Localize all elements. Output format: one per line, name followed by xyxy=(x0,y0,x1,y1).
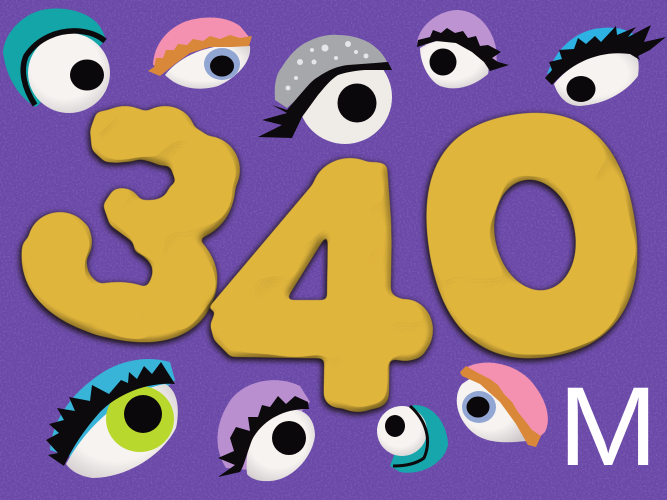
black lash line xyxy=(393,406,428,466)
teal felt lid xyxy=(390,405,448,473)
clay lumps thickening the 3 xyxy=(28,106,240,338)
white eyeball xyxy=(247,410,315,481)
silver glitter lid xyxy=(275,35,387,108)
eye: silver glitter lid xyxy=(258,35,392,144)
eye: small teal bottom xyxy=(377,405,448,473)
eye: pink lid top xyxy=(148,17,252,89)
black spiky lash xyxy=(545,25,666,85)
blue iris xyxy=(462,391,496,423)
black lash line xyxy=(23,31,105,105)
pupil xyxy=(210,56,234,76)
clay lumps thickening the 4 xyxy=(281,154,438,420)
digit 3: 3 xyxy=(0,46,266,404)
digit 3 xyxy=(15,102,244,350)
eye: lilac lid bottom xyxy=(217,380,315,481)
pupil xyxy=(70,60,104,90)
orange scalloped trim xyxy=(148,35,252,76)
number 340 in yellow clay xyxy=(15,102,642,420)
eye: teal top left xyxy=(3,8,110,113)
pupil xyxy=(338,84,376,122)
black zigzag lash xyxy=(218,396,309,477)
eye: blue lid with green iris xyxy=(46,359,178,478)
white eyeball xyxy=(554,52,639,106)
pupil xyxy=(466,396,490,418)
blue felt lid xyxy=(50,359,175,460)
glitter sparkles xyxy=(286,41,368,90)
blue iris xyxy=(204,48,240,80)
black zigzag lash xyxy=(417,28,509,71)
digit 0: 0 xyxy=(402,47,662,424)
white eyeball xyxy=(298,50,392,144)
white eyeball xyxy=(28,33,110,113)
green iris xyxy=(106,386,174,452)
eye: blue lid top right xyxy=(545,25,666,106)
black lash band with lashes xyxy=(258,62,392,138)
eye: lilac lid top xyxy=(417,10,509,88)
eye: pink lid lower right xyxy=(457,363,548,447)
white eyeball xyxy=(420,40,488,88)
teal felt lid xyxy=(3,8,106,107)
clay lump around the 0 counter xyxy=(485,156,576,312)
pink felt lid xyxy=(153,17,250,66)
lilac felt lid xyxy=(417,10,497,64)
digit 0 xyxy=(420,109,642,366)
lilac felt lid xyxy=(217,380,310,470)
white eyeball xyxy=(66,384,178,478)
black zigzag lash xyxy=(46,362,175,466)
pupil xyxy=(430,48,456,76)
white eyeball xyxy=(457,372,528,442)
white eyeball xyxy=(377,406,427,456)
pink felt lid xyxy=(462,363,548,440)
letter M: M xyxy=(558,364,658,489)
digit 4: 4 xyxy=(207,105,425,464)
pupil xyxy=(385,415,405,437)
pupil xyxy=(272,421,306,455)
orange scalloped trim xyxy=(460,366,541,447)
pupil xyxy=(124,395,162,433)
blue felt lid xyxy=(547,28,636,74)
pupil xyxy=(566,76,596,102)
white eyeball xyxy=(165,45,250,89)
